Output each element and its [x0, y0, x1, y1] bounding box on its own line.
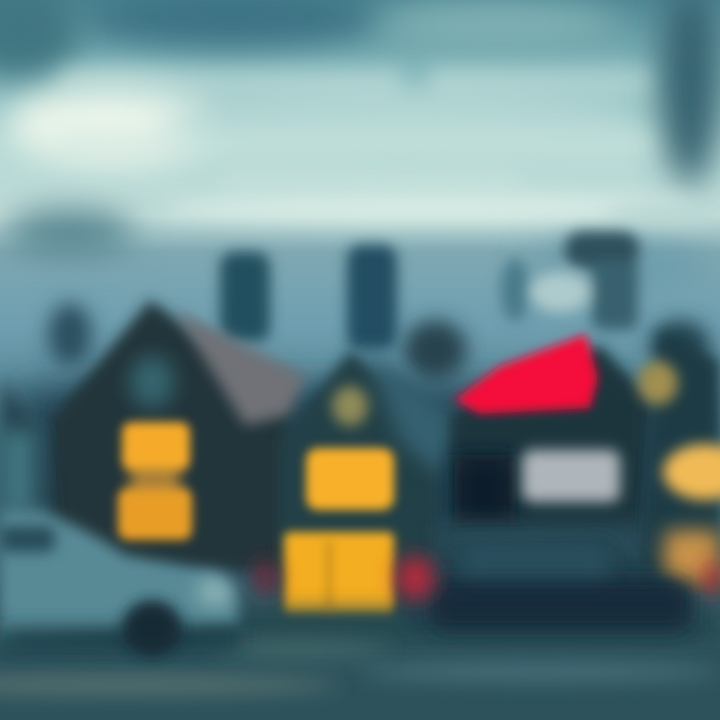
pale window [522, 450, 620, 502]
chimneys [220, 232, 639, 350]
left edge house [0, 375, 50, 530]
house 3, right, dark [440, 345, 650, 590]
lower window [118, 488, 192, 540]
upper window [122, 422, 190, 470]
wheel [122, 600, 182, 656]
house 4, far right [638, 330, 720, 590]
house 2, centre [280, 345, 465, 620]
pale bands across the sky [60, 66, 650, 190]
lower window [664, 530, 720, 585]
red tail lights [254, 556, 720, 600]
ground [0, 610, 720, 720]
upper window [306, 448, 394, 510]
distant rooftops [20, 258, 710, 575]
upper window [663, 444, 720, 500]
car, right, dark [405, 535, 695, 630]
yellow door [284, 532, 394, 616]
middle window glow [130, 460, 180, 500]
storm clouds [0, 0, 720, 290]
house 1, left [50, 300, 305, 570]
red roof [454, 334, 598, 414]
car, left, light blue [0, 510, 240, 656]
